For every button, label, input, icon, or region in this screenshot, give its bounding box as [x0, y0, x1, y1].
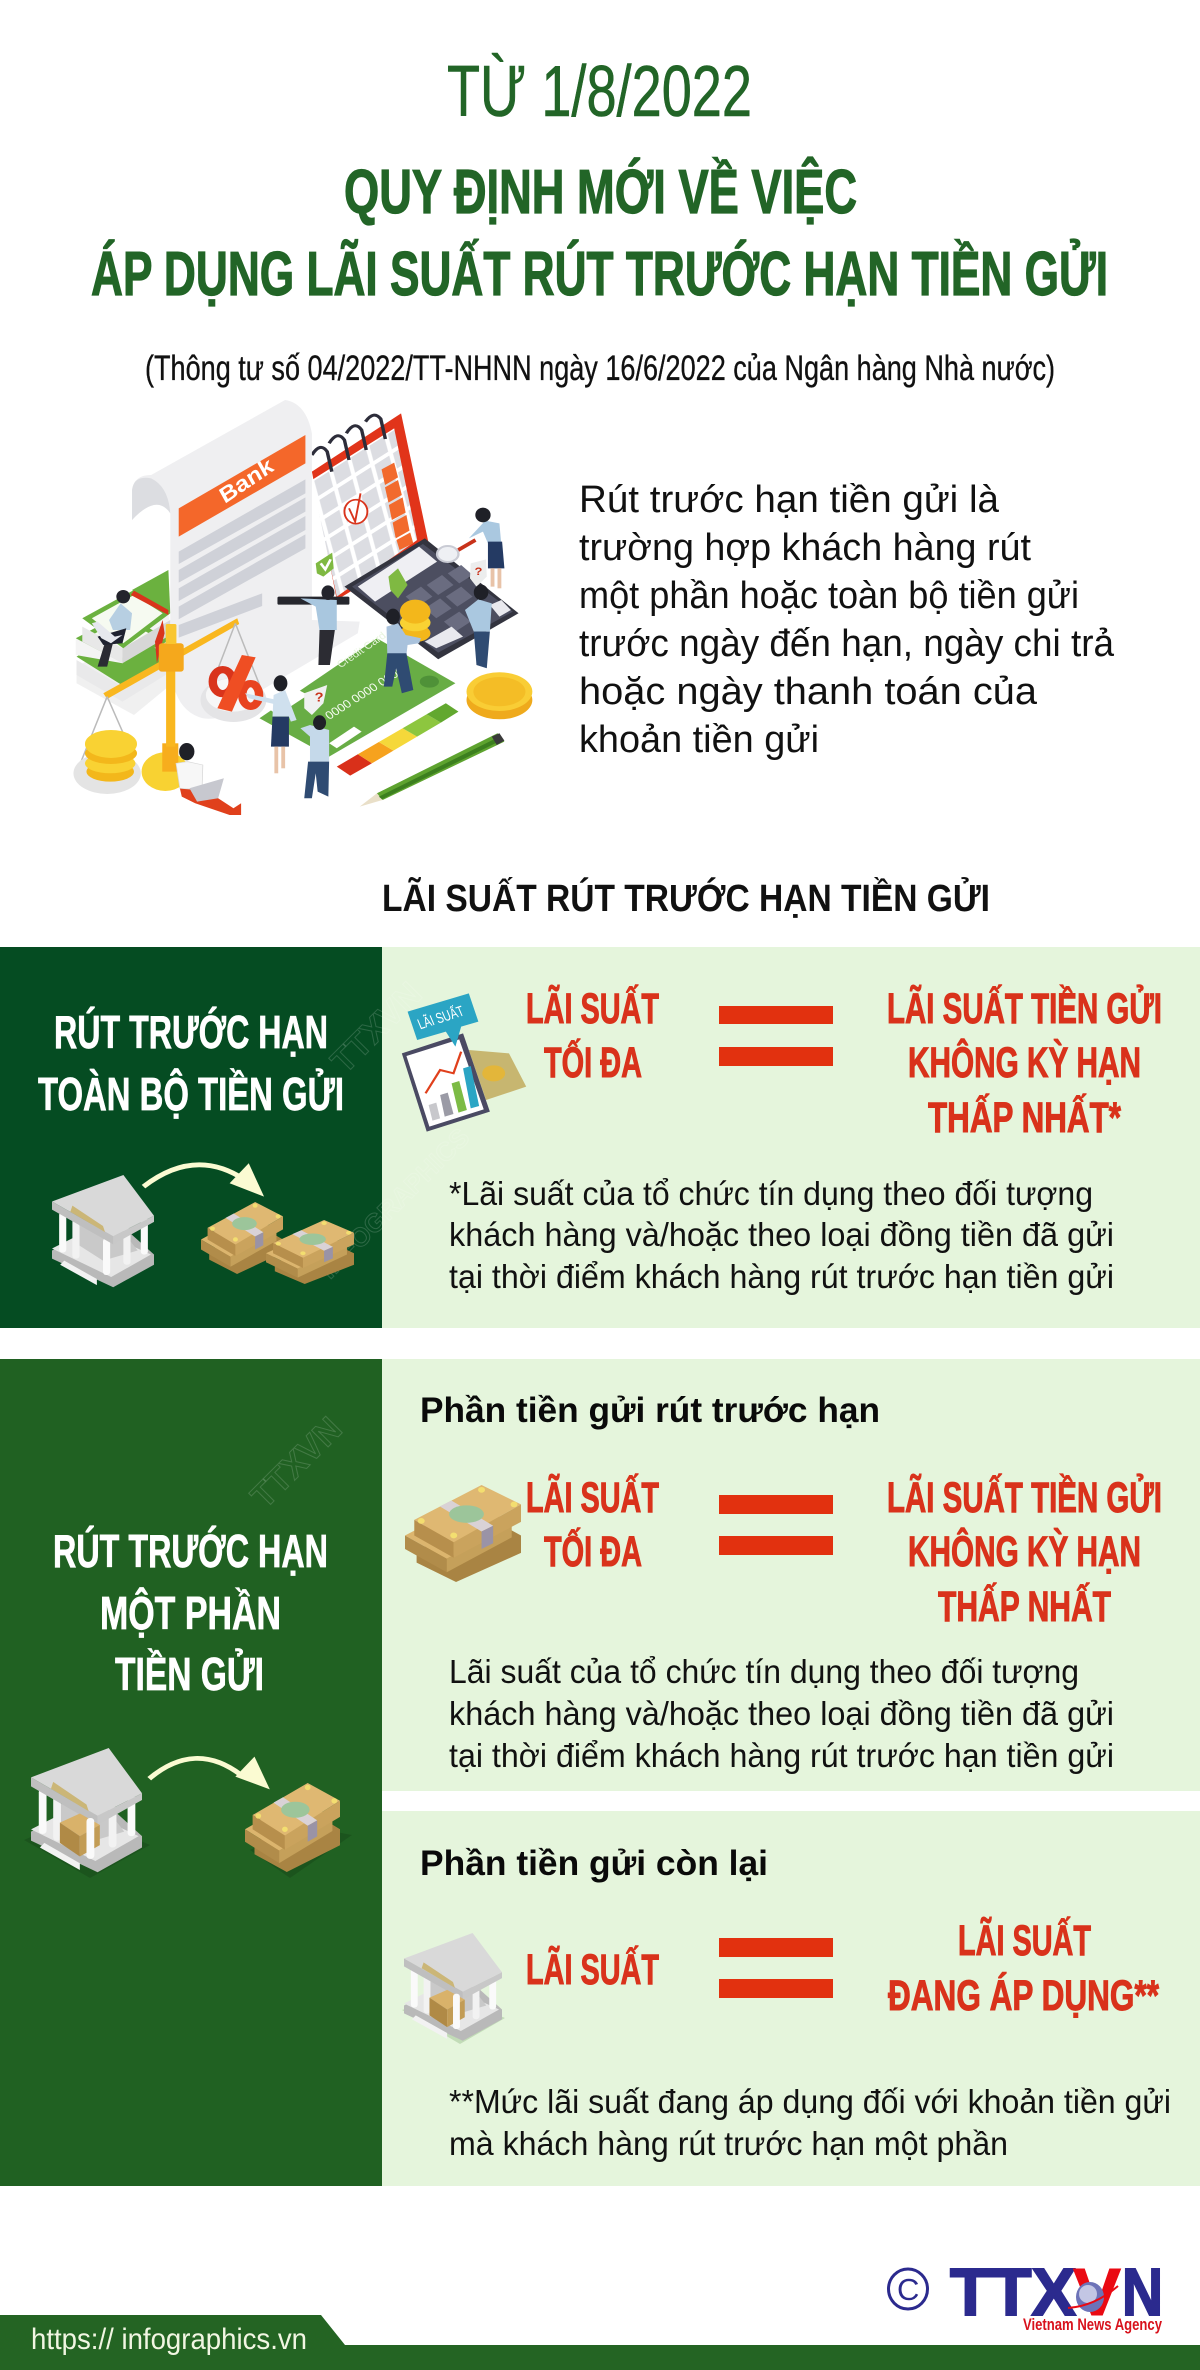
panel heading: RÚT TRƯỚC HẠN — [53, 1525, 328, 1577]
small green check leaves — [316, 553, 408, 598]
panel heading: TOÀN BỘ TIỀN GỬI — [38, 1068, 344, 1120]
paper bank statement: Bank — [213, 454, 280, 507]
section heading: LÃI SUẤT RÚT TRƯỚC HẠN TIỀN GỬI — [382, 876, 990, 920]
panel background: dark label side — [0, 1359, 382, 2186]
intro paragraph: khoản tiền gửi — [579, 719, 819, 761]
panel heading — [53, 1525, 328, 1700]
subheading: withdrawn portion: Phần tiền gửi rút trước hạn — [420, 1391, 880, 1430]
icon: bank — [52, 1175, 154, 1287]
explanatory text: Lãi suất của tổ chức tín dụng theo đối tượng — [449, 1653, 1079, 1690]
credit card: 0000 0000 0000 — [322, 663, 407, 722]
title: date: TỪ 1/8/2022 — [447, 52, 752, 132]
icon: cash stack — [245, 1783, 340, 1872]
illustration: bank documents, scales and people — [73, 400, 532, 815]
icon shadows — [24, 1815, 352, 1878]
rate label: TỐI ĐA — [544, 1527, 642, 1576]
footnote — [449, 2083, 1171, 2162]
watermark: TTXVN — [244, 1410, 349, 1516]
rate value: THẤP NHẤT* — [928, 1094, 1121, 1142]
logo: TTXVN — [888, 2255, 1163, 2334]
panel heading: RÚT TRƯỚC HẠN — [54, 1006, 328, 1058]
credit card: Credit Card — [335, 630, 389, 671]
person: woman at card — [245, 675, 327, 773]
footnote: mà khách hàng rút trước hạn một phần — [449, 2125, 1008, 2162]
rating bar — [337, 703, 458, 776]
equals sign — [719, 1495, 833, 1555]
rate label — [526, 1474, 659, 1576]
title: line one: QUY ĐỊNH MỚI VỀ VIỆC — [344, 158, 857, 227]
rate value — [887, 984, 1162, 1142]
panel: partial early withdrawal — [0, 1359, 1200, 2186]
footnote: khách hàng và/hoặc theo loại đồng tiền đã gửi — [449, 1216, 1114, 1253]
icon: interest rate chart — [402, 993, 526, 1132]
money stacks — [76, 570, 170, 715]
person: woman at card: ? — [315, 690, 323, 704]
footnote: **Mức lãi suất đang áp dụng đối với khoản tiền gửi — [449, 2083, 1171, 2120]
wordmark: V — [1073, 2255, 1121, 2330]
person: man holding pen — [277, 585, 349, 665]
intro paragraph: trước ngày đến hạn, ngày chi trả — [579, 623, 1115, 665]
watermark: TTXVN — [324, 975, 429, 1081]
balance scale — [73, 618, 266, 794]
wordmark: TTX — [950, 2255, 1076, 2330]
rate label: LÃI SUẤT — [526, 1474, 659, 1522]
footnote: tại thời điểm khách hàng rút trước hạn tiền gửi — [449, 1258, 1114, 1295]
rate value — [887, 1473, 1162, 1631]
wordmark — [950, 2255, 1163, 2330]
intro paragraph: trường hợp khách hàng rút — [579, 527, 1031, 569]
rate value — [888, 1917, 1159, 2020]
equals sign — [719, 1006, 833, 1066]
person: woman with magnifier: ? — [475, 565, 482, 578]
credit card — [259, 630, 455, 757]
gold coin — [467, 672, 532, 719]
rate value: LÃI SUẤT — [958, 1917, 1091, 1965]
calculator — [344, 538, 519, 659]
rate label: LÃI SUẤT — [526, 985, 659, 1033]
paper bank statement — [132, 400, 360, 719]
icon shadow: small bank — [402, 1995, 505, 2044]
person: woman sitting with laptop — [176, 743, 241, 815]
panel background: upper content — [382, 1359, 1200, 1791]
intro paragraph: hoặc ngày thanh toán của — [579, 671, 1038, 713]
people — [92, 508, 504, 815]
icon: bank with cash small — [404, 1933, 502, 2041]
wordmark: N — [1122, 2255, 1163, 2330]
copyright mark: C — [897, 2272, 919, 2307]
globe — [1068, 2282, 1118, 2312]
copyright mark — [888, 2269, 928, 2309]
equals sign — [719, 1938, 833, 1998]
intro paragraph: một phần hoặc toàn bộ tiền gửi — [579, 575, 1079, 617]
footnote: *Lãi suất của tổ chức tín dụng theo đối tượng — [449, 1175, 1093, 1212]
panel heading: TIỀN GỬI — [115, 1648, 264, 1700]
icon: cash stack small — [405, 1485, 521, 1582]
person: woman on money stack — [92, 590, 132, 667]
explanatory text: khách hàng và/hoặc theo loại đồng tiền đã gửi — [449, 1695, 1114, 1732]
tagline: Vietnam News Agency — [1023, 2315, 1162, 2334]
icon: interest rate chart: LÃI SUẤT — [414, 1001, 467, 1033]
footer band — [0, 2315, 1200, 2370]
watermark: INFOGRAPHICS — [313, 1122, 475, 1284]
explanatory text — [449, 1653, 1114, 1774]
footer url: https:// infographics.vn — [31, 2323, 307, 2356]
rate value: THẤP NHẤT — [938, 1583, 1111, 1631]
rate label — [526, 985, 659, 1087]
panel background: light content side — [382, 947, 1200, 1328]
footnote — [449, 1175, 1114, 1295]
person: man with hand on head — [300, 715, 329, 798]
panel background: lower content — [382, 1811, 1200, 2186]
icon: cash stacks — [201, 1202, 354, 1284]
icon: curved arrow — [149, 1757, 270, 1789]
icon: curved arrow — [144, 1163, 264, 1197]
rate label: LÃI SUẤT — [526, 1946, 659, 1994]
panel heading: MỘT PHẦN — [100, 1587, 281, 1639]
person: woman with magnifier — [437, 508, 504, 588]
intro paragraph — [579, 479, 1115, 761]
panel background: dark label side — [0, 947, 382, 1328]
explanatory text: tại thời điểm khách hàng rút trước hạn tiền gửi — [449, 1737, 1114, 1774]
panel: full early withdrawal — [0, 947, 1200, 1328]
pencil — [360, 733, 504, 807]
calendar — [312, 413, 429, 600]
icon: bank with cash — [31, 1748, 142, 1872]
subheading: remaining portion: Phần tiền gửi còn lại — [420, 1844, 768, 1883]
panel heading — [38, 1006, 344, 1120]
watermark — [313, 975, 475, 1284]
person: man carrying coins — [384, 600, 431, 693]
rate label: TỐI ĐA — [544, 1038, 642, 1087]
intro paragraph: Rút trước hạn tiền gửi là — [579, 479, 1000, 521]
person: man on calculator — [465, 585, 492, 668]
